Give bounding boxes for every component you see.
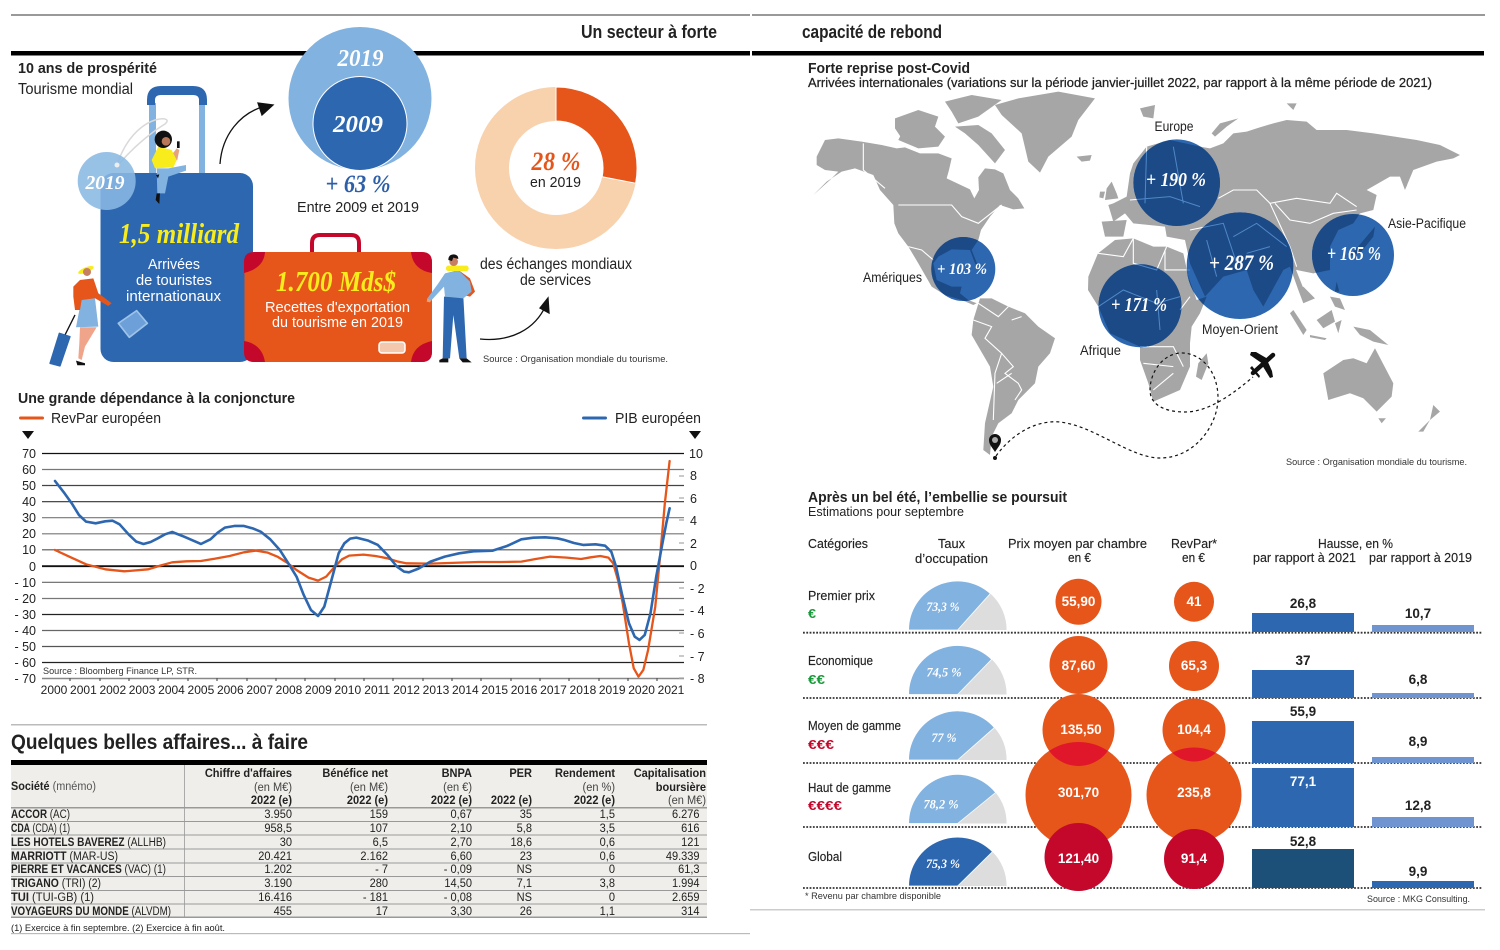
line chart: 50 <box>22 479 36 493</box>
icon: orange suitcase <box>244 235 432 362</box>
column headers: par rapport à 2019 <box>1369 550 1472 565</box>
line chart: 40 <box>22 495 36 509</box>
column: chiffre d'affaires: 16.416 <box>258 892 292 904</box>
panel: hotel table <box>750 489 1485 910</box>
line chart <box>14 447 705 697</box>
bars: compared with 2021: 77,1 <box>1290 774 1317 789</box>
panel: 10 ans de prospérité <box>18 27 668 366</box>
column: BNPA: 6,60 <box>451 851 472 863</box>
gauge: Moyen de gamme: 77 % <box>932 731 956 745</box>
line chart: - 7 <box>690 650 705 664</box>
column: bénéfice net: 107 <box>370 823 388 835</box>
bubbles: average price: 301,70 <box>1058 785 1099 800</box>
column: capitalisation <box>634 768 707 918</box>
category labels: Premier prix <box>808 588 875 603</box>
category labels: Global <box>808 849 842 864</box>
line chart: 2009 <box>305 683 332 697</box>
column: BNPA: 14,50 <box>444 878 472 890</box>
proportional circles 2009 and 2019: 2019 <box>337 46 384 72</box>
bubbles: RevPar: 235,8 <box>1177 785 1211 800</box>
line chart: - 20 <box>14 592 36 606</box>
column: chiffre d'affaires: 3.190 <box>264 878 292 890</box>
column: PER: NS <box>517 864 532 876</box>
line chart: 0 <box>690 559 697 573</box>
line chart: 2016 <box>511 683 538 697</box>
bars: compared with 2019: 8,9 <box>1409 734 1427 749</box>
icon: tablet sticker <box>118 311 147 337</box>
line chart: 2013 <box>423 683 450 697</box>
column: PER: PER <box>509 768 533 780</box>
map heading: Forte reprise post-Covid <box>808 60 970 77</box>
table rows: company names: ACCOR (AC) <box>11 809 70 821</box>
column: PER: 23 <box>520 851 532 863</box>
orange suitcase caption <box>265 299 410 331</box>
column: BNPA: 2,70 <box>451 837 472 849</box>
column: rendement: 3,8 <box>600 878 615 890</box>
arrow to circles <box>220 103 273 164</box>
value Moyen-Orient: + 287 % <box>1209 250 1274 275</box>
heading: Une grande dépendance à la conjoncture <box>18 390 295 407</box>
line chart: 20 <box>22 527 36 541</box>
line chart: 6 <box>690 492 697 506</box>
line chart: 2004 <box>158 683 185 697</box>
column: rendement: 0 <box>609 892 615 904</box>
icon: map pin <box>989 434 1001 460</box>
gauge: Global <box>909 837 1007 886</box>
column: chiffre d'affaires: 20.421 <box>258 851 292 863</box>
donut caption: de services <box>520 272 591 289</box>
source: Source : Organisation mondiale du tourisme. <box>483 354 668 365</box>
panel: world map section <box>808 60 1467 468</box>
line chart: 2021 <box>658 683 685 697</box>
price symbols: €€ <box>808 672 825 687</box>
bars: compared with 2019: 9,9 <box>1409 864 1427 879</box>
line chart: 10 <box>689 447 703 461</box>
column: bénéfice net: 2.162 <box>360 851 388 863</box>
column headers: en € <box>1068 550 1092 565</box>
line chart: 4 <box>690 514 697 528</box>
column: BNPA: 2022 (e) <box>431 795 472 807</box>
category labels: Moyen de gamme <box>808 718 901 733</box>
bars: compared with 2019: 12,8 <box>1405 798 1432 813</box>
line chart: 2018 <box>570 683 597 697</box>
line chart: 8 <box>690 469 697 483</box>
legend: RevPar: RevPar européen <box>51 410 161 427</box>
column: rendement: 0,6 <box>600 837 615 849</box>
table rows: company names <box>11 809 171 918</box>
orange suitcase caption: Recettes d'exportation <box>265 299 410 316</box>
bubbles: average price: 87,60 <box>1062 658 1095 673</box>
line chart: 2011 <box>364 683 390 697</box>
line chart: 2019 <box>599 683 626 697</box>
line chart: - 6 <box>690 627 705 641</box>
orange suitcase caption: du tourisme en 2019 <box>272 314 403 331</box>
line chart: 70 <box>22 447 36 461</box>
column: capitalisation: boursière <box>656 782 707 794</box>
price symbols: €€€€ <box>808 798 842 813</box>
line chart: 2012 <box>393 683 420 697</box>
column headers: en € <box>1182 550 1206 565</box>
suitcase caption: de touristes <box>136 272 212 289</box>
right axis marker <box>689 431 701 439</box>
circle: Afrique <box>1098 264 1182 348</box>
map source: Source : Organisation mondiale du tourisme. <box>1286 457 1467 468</box>
proportional circles 2009 and 2019 <box>288 27 432 170</box>
category labels: Economique <box>808 653 873 668</box>
bars: compared with 2021: 52,8 <box>1290 834 1317 849</box>
column: BNPA: (en €) <box>443 782 472 794</box>
column: PER: 5,8 <box>517 823 532 835</box>
table title: Quelques belles affaires... à faire <box>11 731 308 754</box>
growth figure: + 63 % <box>326 171 390 198</box>
column: chiffre d'affaires: 455 <box>274 906 292 918</box>
column headers: Hausse, en % <box>1318 536 1393 551</box>
column: chiffre d'affaires: 958,5 <box>264 823 292 835</box>
column: capitalisation: 314 <box>681 906 700 918</box>
map subheading: Arrivées internationales (variations sur la période janvier-juillet 2022, par rapport à la même période de 2021) <box>808 76 1432 90</box>
bubbles: average price <box>1026 579 1132 891</box>
bars: compared with 2021: 26,8 <box>1290 596 1317 611</box>
table source: Source : MKG Consulting. <box>1367 894 1470 905</box>
column: chiffre d'affaires: 1.202 <box>264 864 292 876</box>
line chart: 2002 <box>99 683 126 697</box>
column: rendement: Rendement <box>555 768 615 780</box>
price symbols <box>808 606 842 813</box>
footnote: * Revenu par chambre disponible <box>805 891 941 902</box>
donut caption: des échanges mondiaux <box>480 256 632 273</box>
column: chiffre d'affaires: (en M€) <box>254 782 292 794</box>
category labels <box>808 588 901 864</box>
column: BNPA: 0,67 <box>451 809 472 821</box>
bubbles: RevPar: 91,4 <box>1181 851 1208 866</box>
column: rendement: 2022 (e) <box>574 795 615 807</box>
column: chiffre d'affaires: Chiffre d'affaires <box>205 768 292 780</box>
left axis marker <box>22 431 34 439</box>
table rows: company names: CDA (CDA) (1) <box>11 823 70 835</box>
line chart: 2020 <box>628 683 655 697</box>
icon: blue suitcase <box>100 173 253 362</box>
suitcase caption <box>126 256 222 305</box>
column: BNPA: 2,10 <box>451 823 472 835</box>
gauge: Moyen de gamme <box>909 711 1007 760</box>
column: rendement: 1,5 <box>600 809 615 821</box>
line chart: 2000 <box>41 683 68 697</box>
column: PER: 2022 (e) <box>491 795 532 807</box>
gauge: Economique <box>909 645 1007 694</box>
column: bénéfice net: (en M€) <box>350 782 388 794</box>
legend: PIB <box>582 410 701 427</box>
subheading: Tourisme mondial <box>18 81 133 98</box>
column: PER: 35 <box>520 809 532 821</box>
price symbols: €€€ <box>808 737 834 752</box>
column: rendement: (en %) <box>583 782 615 794</box>
line chart: 2014 <box>452 683 479 697</box>
column: capitalisation: 6.276 <box>672 809 700 821</box>
suitcase figure: 1,5 milliard <box>119 219 240 250</box>
column: bénéfice net: 2022 (e) <box>347 795 388 807</box>
column: bénéfice net: - 181 <box>363 892 388 904</box>
column: bénéfice net: 6,5 <box>373 837 388 849</box>
value Europe: + 190 % <box>1146 169 1206 191</box>
world map <box>813 92 1460 458</box>
value Amériques: + 103 % <box>937 261 987 278</box>
suitcase caption: internationaux <box>126 288 222 305</box>
column: PER: 26 <box>520 906 532 918</box>
column: bénéfice net: 280 <box>370 878 388 890</box>
circle: Asie-Pacifique <box>1312 214 1394 296</box>
line chart: 2001 <box>70 683 97 697</box>
column: BNPA: - 0,08 <box>444 892 472 904</box>
orange suitcase figure: 1.700 Mds$ <box>276 267 396 298</box>
icon: seated woman <box>152 131 186 204</box>
icon: luggage tag 2019: 2019 <box>85 172 124 194</box>
growth caption: Entre 2009 et 2019 <box>297 199 419 216</box>
column headers: Catégories <box>808 536 868 551</box>
bars: compared with 2021: 55,9 <box>1290 704 1316 719</box>
column: BNPA: BNPA <box>442 768 473 780</box>
gauge: Global: 75,3 % <box>926 857 960 871</box>
value Afrique: + 171 % <box>1111 294 1167 316</box>
column: rendement <box>555 768 615 918</box>
line chart: 2010 <box>334 683 361 697</box>
bars: compared with 2019: 10,7 <box>1405 606 1431 621</box>
column: capitalisation: 2.659 <box>672 892 700 904</box>
label Europe: Europe <box>1154 119 1194 134</box>
column: rendement: 1,1 <box>600 906 615 918</box>
bubbles: RevPar <box>1146 582 1242 889</box>
flight path <box>996 353 1253 458</box>
line chart: 0 <box>29 560 36 574</box>
table rows: company names: TUI (TUI-GB) (1) <box>11 892 94 904</box>
column: capitalisation: 61,3 <box>678 864 700 876</box>
line chart: - 2 <box>690 582 705 596</box>
bubbles: RevPar: 41 <box>1186 594 1202 609</box>
gauge: Economique: 74,5 % <box>926 666 962 680</box>
label Moyen-Orient: Moyen-Orient <box>1202 322 1278 337</box>
illustrations on and around the blue suitcase <box>50 131 186 366</box>
line chart: 2017 <box>540 683 567 697</box>
column: rendement: 0,6 <box>600 851 615 863</box>
bubbles: average price: 135,50 <box>1060 722 1102 737</box>
column: BNPA <box>431 768 473 918</box>
gauge: Premier prix <box>909 581 1007 630</box>
line chart: 2006 <box>217 683 244 697</box>
gauge: Haut de gamme: 78,2 % <box>924 798 958 812</box>
column: capitalisation: 121 <box>681 837 700 849</box>
column headers: par rapport à 2021 <box>1253 550 1356 565</box>
heading: Après un bel été, l’embellie se poursuit <box>808 489 1067 506</box>
title left: Un secteur à forte <box>581 22 717 42</box>
price symbols: € <box>808 606 816 621</box>
icon: male backpacker <box>427 254 475 362</box>
column: chiffre d'affaires: 3.950 <box>264 809 292 821</box>
column: BNPA: - 0,09 <box>444 864 472 876</box>
column headers: Prix moyen par chambre <box>1008 536 1147 551</box>
table rows: company names: MARRIOTT (MAR-US) <box>11 851 118 863</box>
table rows: company names: PIERRE ET VACANCES (VAC) (1) <box>11 864 166 876</box>
line chart: Source : Bloomberg Finance LP, STR. <box>43 666 197 677</box>
column: PER: 7,1 <box>517 878 532 890</box>
column: PER: 18,6 <box>511 837 532 849</box>
line chart: 2005 <box>188 683 215 697</box>
icon: woman with trolley <box>50 264 112 366</box>
column: capitalisation: Capitalisation <box>634 768 706 780</box>
value Asie: + 165 % <box>1327 243 1381 265</box>
label Afrique: Afrique <box>1080 343 1121 358</box>
title right: capacité de rebond <box>802 22 942 42</box>
table header: company: Société (mnémo) <box>11 781 96 793</box>
column: bénéfice net: - 7 <box>375 864 388 876</box>
column: bénéfice net: 159 <box>370 809 388 821</box>
bubbles: RevPar: 104,4 <box>1177 722 1211 737</box>
column: rendement: 3,5 <box>600 823 615 835</box>
line chart: - 70 <box>14 672 36 686</box>
donut chart: en 2019 <box>530 174 581 191</box>
line chart: 60 <box>22 463 36 477</box>
column headers <box>808 536 1472 566</box>
line chart: - 8 <box>690 672 705 686</box>
line chart: 2015 <box>481 683 508 697</box>
circle: Amériques <box>931 237 996 301</box>
category labels: Haut de gamme <box>808 780 891 795</box>
donut chart <box>492 87 637 232</box>
label Amériques: Amériques <box>863 270 922 285</box>
legend: PIB: PIB européen <box>615 410 701 427</box>
bars: compared with 2019: 6,8 <box>1409 672 1428 687</box>
column: capitalisation: 1.994 <box>672 878 700 890</box>
line chart: 30 <box>22 511 36 525</box>
donut chart: 28 % <box>531 147 580 176</box>
line chart: - 4 <box>690 604 705 618</box>
line chart: 2003 <box>129 683 156 697</box>
icon: tag string <box>117 119 167 165</box>
column: bénéfice net: 17 <box>376 906 388 918</box>
icon: luggage tag 2019 <box>78 152 136 210</box>
column: chiffre d'affaires <box>205 768 292 918</box>
column: chiffre d'affaires: 2022 (e) <box>251 795 292 807</box>
gauge: Premier prix: 73,3 % <box>926 600 960 614</box>
label Asie-Pacifique: Asie-Pacifique <box>1388 216 1466 231</box>
arrow to donut <box>480 298 549 339</box>
gauge: Haut de gamme <box>909 774 1007 824</box>
column headers: Taux <box>938 536 965 551</box>
circle: Moyen-Orient <box>1186 212 1294 319</box>
panel: line chart section <box>14 390 705 697</box>
bubbles: RevPar: 65,3 <box>1181 658 1208 673</box>
panel: stock table <box>11 724 750 934</box>
bubbles: average price: 55,90 <box>1062 594 1095 609</box>
bars: compared with 2021: 37 <box>1295 653 1311 668</box>
bars: compared with 2019 <box>1372 606 1474 888</box>
column headers: d’occupation <box>915 551 988 566</box>
line chart: 2008 <box>276 683 303 697</box>
line chart: - 30 <box>14 608 36 622</box>
column: rendement: 0 <box>609 864 615 876</box>
column headers: RevPar* <box>1171 536 1217 551</box>
line chart: - 50 <box>14 640 36 654</box>
table rows: company names: LES HOTELS BAVEREZ (ALLHB) <box>11 837 166 849</box>
column: capitalisation: 49.339 <box>666 851 700 863</box>
table rows: company names: TRIGANO (TRI) (2) <box>11 878 101 890</box>
column: PER: NS <box>517 892 532 904</box>
circle: Europe <box>1133 139 1220 226</box>
column: bénéfice net: Bénéfice net <box>322 768 388 780</box>
donut caption <box>480 256 632 289</box>
suitcase caption: Arrivées <box>148 256 200 273</box>
line chart: - 10 <box>14 576 36 590</box>
subheading: Estimations pour septembre <box>808 505 964 519</box>
heading: 10 ans de prospérité <box>18 60 157 77</box>
bubbles: average price: 121,40 <box>1058 851 1099 866</box>
line chart: 2007 <box>246 683 273 697</box>
column: chiffre d'affaires: 30 <box>280 837 292 849</box>
proportional circles 2009 and 2019: 2009 <box>332 112 383 138</box>
icon: blue suitcase handle <box>147 86 207 174</box>
column: BNPA: 3,30 <box>451 906 472 918</box>
column: capitalisation: 616 <box>681 823 700 835</box>
line chart: - 40 <box>14 624 36 638</box>
line chart: 2 <box>690 537 697 551</box>
column: capitalisation: (en M€) <box>668 795 706 807</box>
bars: compared with 2021 <box>1252 596 1354 888</box>
table rows: company names: VOYAGEURS DU MONDE (ALVDM) <box>11 906 171 918</box>
line chart: - 60 <box>14 656 36 670</box>
table footnote: (1) Exercice à fin septembre. (2) Exercice à fin août. <box>11 923 225 934</box>
line chart: 10 <box>22 543 36 557</box>
column: bénéfice net <box>322 768 388 918</box>
column: PER <box>491 768 533 918</box>
icon: plane <box>1250 352 1273 378</box>
